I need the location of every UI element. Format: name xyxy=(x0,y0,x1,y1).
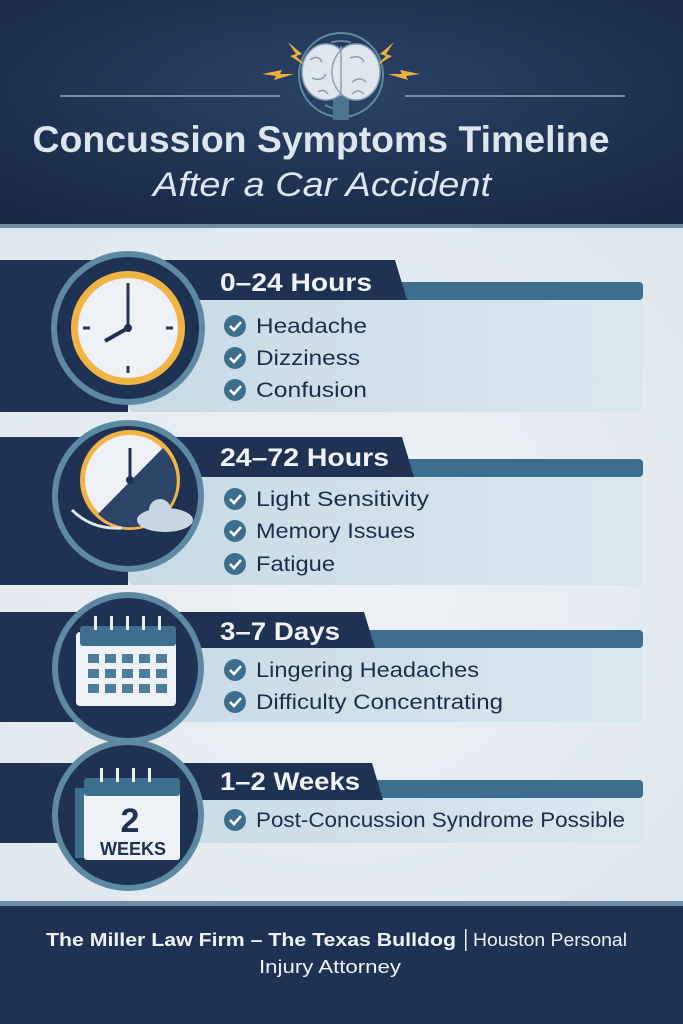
icon: 2 weeks calendar: 2 xyxy=(121,802,139,840)
footer xyxy=(0,901,683,1024)
icon: 2 weeks calendar: WEEKS xyxy=(100,839,166,859)
list xyxy=(224,488,430,576)
section: 0-24 hours xyxy=(0,251,643,412)
list xyxy=(224,315,367,402)
list: Light Sensitivity xyxy=(256,488,430,511)
list: Post-Concussion Syndrome Possible xyxy=(256,809,625,832)
list: Headache xyxy=(256,315,367,338)
subtitle: After a Car Accident xyxy=(151,166,493,204)
list: Lingering Headaches xyxy=(256,659,479,682)
footer: Houston Personal xyxy=(473,930,627,950)
icon: clock xyxy=(51,251,205,405)
list xyxy=(224,659,503,714)
footer: The Miller Law Firm – The Texas Bulldog xyxy=(46,930,456,950)
icon: 2 weeks calendar xyxy=(52,739,204,891)
list: Difficulty Concentrating xyxy=(256,691,503,714)
section: 24-72 hours xyxy=(0,420,643,585)
heading: 3-7 Days: 3–7 Days xyxy=(220,618,340,646)
header xyxy=(0,0,683,228)
list: Fatigue xyxy=(256,553,335,576)
section: 3-7 days xyxy=(0,592,643,744)
heading: 24-72 Hours: 24–72 Hours xyxy=(220,444,389,472)
icon: day/night clock xyxy=(52,420,204,572)
list: Confusion xyxy=(256,379,367,402)
icon: brain with lightning xyxy=(262,33,420,120)
footer: Injury Attorney xyxy=(259,957,401,977)
icon: calendar xyxy=(52,592,204,744)
list: Memory Issues xyxy=(256,520,415,543)
title: Concussion Symptoms Timeline xyxy=(32,119,610,160)
heading: 0-24 Hours: 0–24 Hours xyxy=(220,269,372,297)
heading: 1-2 Weeks: 1–2 Weeks xyxy=(220,768,360,796)
section: 1-2 weeks xyxy=(0,739,643,891)
list: Dizziness xyxy=(256,347,360,370)
